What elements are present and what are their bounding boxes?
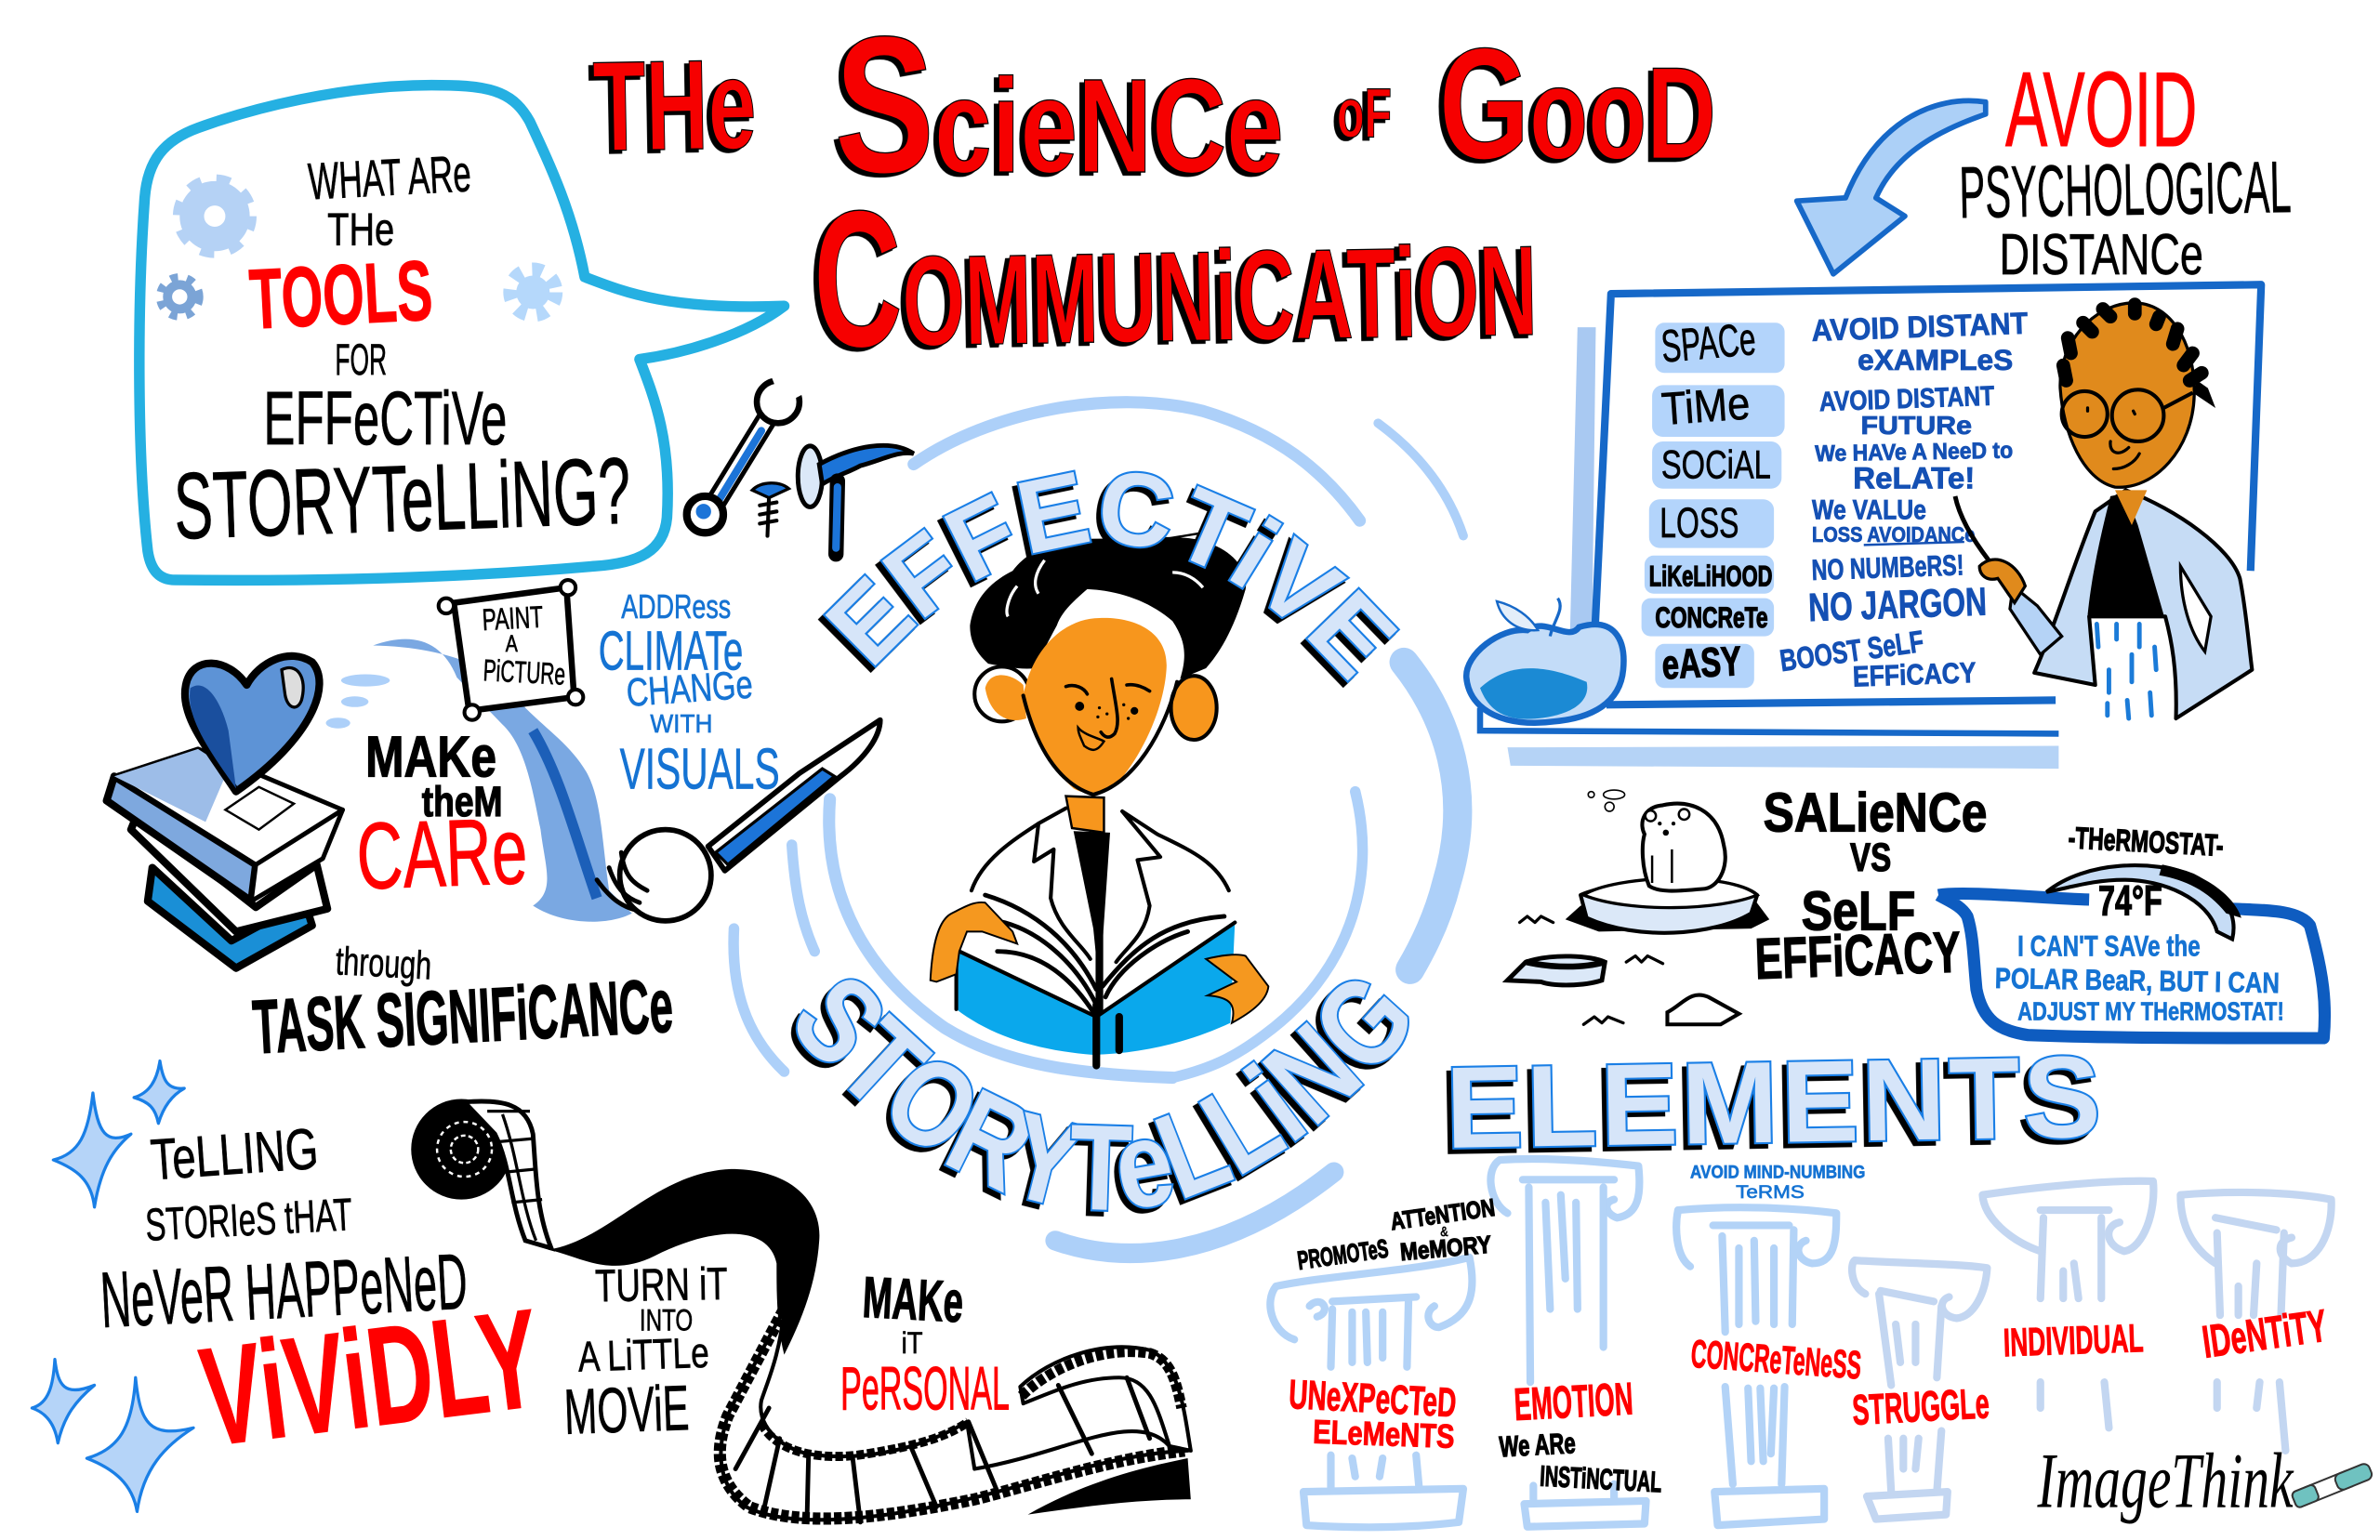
pillar: concreteness — [1676, 1207, 1836, 1525]
black shirt — [2088, 494, 2163, 615]
climate visuals text: ADDRess — [621, 587, 731, 625]
board — [1480, 284, 2261, 769]
bubble question text: FOR — [335, 336, 387, 385]
bubble question text: WHAT ARe — [307, 144, 472, 211]
pillar labels: STRUGGLe — [1851, 1378, 1990, 1434]
board table rows: eXAMPLeS — [1858, 344, 2013, 376]
title — [592, 0, 1716, 388]
panel: telling stories — [32, 1061, 1191, 1522]
climate visuals text: CLIMATe — [599, 622, 743, 682]
curved heading: effective: EFFECTiVE — [818, 469, 1400, 688]
icon: ice floes and water — [1507, 790, 1739, 1024]
trousers dashes — [2096, 625, 2156, 718]
make them care text: theM — [422, 777, 503, 825]
board table rows: LiKeLiHOOD — [1649, 560, 1772, 593]
board table rows: AVOID DISTANT — [1818, 381, 1995, 417]
turn it into a little movie text: A LiTTLe — [577, 1328, 710, 1381]
turn it into a little movie text — [563, 1259, 728, 1448]
pillar labels: INDIVIDUAL — [2003, 1316, 2144, 1365]
title: COMMUNiCATiON — [812, 159, 1539, 388]
pillar labels — [1288, 1163, 2330, 1498]
panel: salience vs self efficacy — [1507, 783, 2325, 1038]
glasses — [2062, 391, 2108, 437]
thermostat bubble: I CAN'T SAVe the — [2017, 930, 2201, 963]
icon: wrench, screw and hammer — [687, 375, 914, 554]
paintbrush — [597, 720, 880, 921]
salience text: VS — [1850, 836, 1891, 880]
salience text — [1754, 783, 1987, 992]
pillar: individual — [1982, 1181, 2153, 1428]
icon: marker pen — [2291, 1462, 2373, 1508]
pillar labels: ELeMeNTS — [1313, 1413, 1455, 1455]
pillar labels: PROMOTeS — [1296, 1234, 1390, 1275]
avoid heading: AVOID — [2005, 50, 2197, 169]
pillar: struggle — [1852, 1260, 1987, 1520]
make them care text: TASK SIGNIFiCANCe — [251, 964, 675, 1070]
icon: heart — [185, 656, 390, 792]
open book — [957, 895, 1235, 1065]
thermostat bubble: 74°F — [2098, 875, 2162, 924]
telling stories text — [99, 1117, 548, 1476]
curved arrow — [1797, 100, 1986, 274]
coat — [2034, 490, 2252, 718]
telling stories text: TeLLING — [149, 1117, 321, 1192]
pillar: unexpected elements — [1270, 1257, 1472, 1527]
make them care text — [251, 725, 675, 1070]
title: ScieNCe — [835, 0, 1284, 214]
turn it into a little movie text: INTO — [640, 1302, 693, 1336]
icon: apple — [1466, 599, 1623, 723]
turn it into a little movie text: MOViE — [563, 1372, 690, 1448]
board table rows: FUTURe — [1860, 411, 1972, 440]
thermostat bubble: POLAR BeaR, BUT I CAN — [1994, 962, 2280, 999]
telling stories text: NeVeR HAPPeNeD — [99, 1238, 469, 1345]
pillar labels: CONCReTeNeSS — [1689, 1332, 1863, 1389]
icon: polar bear on ice — [1566, 804, 1769, 933]
board table rows: NO JARGON — [1807, 580, 1988, 630]
thermostat bubble: -THeRMOSTAT- — [2068, 820, 2225, 862]
make it personal text: MAKe — [861, 1266, 965, 1335]
panel: tools speech bubble — [139, 86, 785, 580]
thermostat bubble: ADJUST MY THeRMOSTAT! — [2017, 996, 2284, 1025]
telling stories text: ViViDLY — [193, 1280, 548, 1476]
bubble question text: STORYTeLLiNG? — [172, 438, 632, 559]
panel: make them care — [107, 580, 880, 1070]
pillar: emotion — [1490, 1159, 1646, 1527]
pillar labels: MeMORY — [1399, 1231, 1493, 1266]
board table rows: NO NUMBeRS! — [1811, 548, 1964, 586]
pillar labels: ATTeNTION — [1389, 1193, 1497, 1235]
climate visuals text — [599, 587, 780, 801]
salience text: SALieNCe — [1764, 783, 1987, 843]
board table rows: We VALUe — [1812, 495, 1926, 526]
thermostat gauge — [2046, 865, 2234, 940]
make it personal text: iT — [902, 1325, 923, 1360]
paint a picture sign: PiCTURe — [483, 652, 566, 691]
facial features — [1066, 678, 1150, 750]
speech bubble outline — [139, 86, 785, 580]
title: oF — [1337, 73, 1392, 151]
avoid heading — [1959, 50, 2292, 287]
board table rows — [1642, 306, 2029, 693]
bubble question text: THe — [327, 205, 394, 256]
paint a picture sign: PAINT — [482, 599, 544, 637]
telling stories text: STORIeS tHAT — [144, 1190, 353, 1251]
make them care text: MAKe — [365, 725, 496, 789]
face — [1024, 618, 1167, 793]
paint a picture sign — [439, 580, 583, 720]
board table rows: LOSS AVOIDANCe — [1812, 522, 1975, 546]
avoid heading: DISTANCe — [2000, 223, 2203, 287]
black shirt — [1074, 831, 1110, 990]
salience text: EFFiCACY — [1754, 920, 1962, 992]
make it personal text — [840, 1266, 1010, 1423]
icon: gears — [160, 179, 556, 317]
pillar: identity — [2180, 1192, 2332, 1451]
film strip — [411, 1099, 1191, 1522]
lab coat — [959, 809, 1272, 990]
make them care text: CARe — [355, 797, 529, 909]
board table rows: We HAVe A NeeD to — [1815, 439, 2013, 467]
teacher figure — [1955, 303, 2252, 718]
pillar labels: EMOTION — [1513, 1374, 1634, 1430]
climate visuals text: VISUALS — [620, 737, 780, 801]
head — [2115, 490, 2147, 525]
make them care text: through — [335, 939, 432, 989]
board table rows: AVOID DISTANT — [1811, 306, 2029, 348]
pillar labels: AVOID MIND-NUMBING — [1690, 1163, 1865, 1183]
climate visuals text: CHANGe — [625, 663, 754, 716]
bubble question text: EFFeCTiVe — [263, 376, 507, 461]
salience text: SeLF — [1802, 882, 1915, 942]
elements heading: ELEMENTS — [1445, 1033, 2102, 1173]
turn it into a little movie text: TURN iT — [595, 1259, 728, 1311]
board table rows: SPACe — [1659, 314, 1758, 373]
curved heading: storytelling: STORYTeLLiNG — [790, 978, 1409, 1217]
board table rows: BOOST SeLF — [1778, 624, 1925, 678]
paint a picture sign: A — [506, 632, 518, 657]
board table rows: EFFiCACY — [1852, 656, 1977, 693]
thermostat bubble — [1938, 820, 2325, 1038]
bubble question text: TOOLS — [247, 244, 435, 348]
panel: avoid psychological distance — [1466, 50, 2292, 769]
board table rows: SOCiAL — [1661, 442, 1771, 487]
hair — [970, 537, 1246, 678]
pillar labels: UNeXPeCTeD — [1288, 1372, 1458, 1426]
board table rows: CONCReTe — [1655, 601, 1768, 634]
pillar labels: INSTiNCTUAL — [1540, 1460, 1662, 1498]
icon: stack of books — [107, 749, 343, 968]
hands — [931, 902, 1017, 981]
board table rows: ReLATe! — [1853, 461, 1975, 495]
neck — [1066, 796, 1104, 833]
panel: elements pillars — [1270, 1033, 2332, 1527]
pillar labels: & — [1440, 1225, 1448, 1240]
title: THe — [592, 33, 758, 178]
climate visuals text: WITH — [650, 709, 713, 738]
ears — [974, 666, 1029, 721]
board table rows: eASY — [1661, 638, 1742, 688]
paint stream — [373, 639, 632, 922]
hair spikes — [2063, 305, 2202, 380]
board table rows: LOSS — [1659, 498, 1739, 546]
make it personal text: PeRSONAL — [840, 1355, 1010, 1423]
pillar labels: TeRMS — [1736, 1182, 1805, 1203]
facial features — [2088, 408, 2139, 468]
board table rows: TiMe — [1660, 378, 1752, 435]
bubble question text — [172, 144, 632, 559]
icon: sparkle stars — [32, 1061, 193, 1511]
pillar labels: We ARe — [1499, 1427, 1576, 1463]
title: GooD — [1439, 16, 1716, 192]
rings around central figure — [734, 402, 1463, 1253]
panel: central reader figure — [931, 533, 1272, 1065]
arm and hand with pointer — [2010, 586, 2062, 654]
